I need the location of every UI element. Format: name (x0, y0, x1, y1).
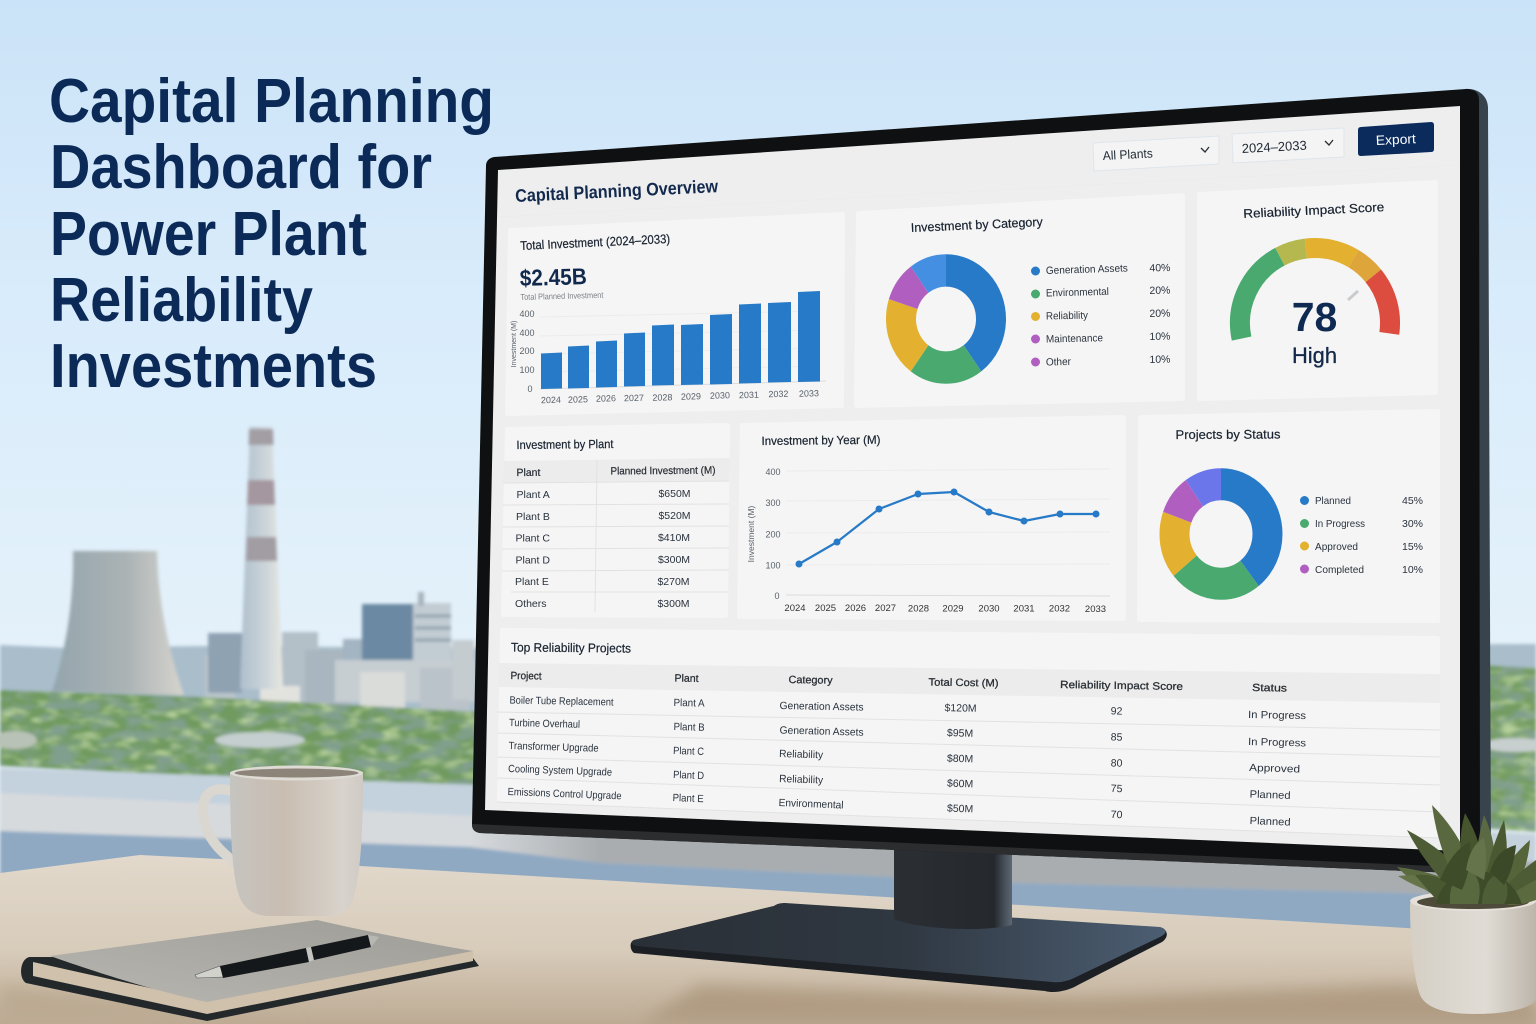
gauge (1240, 248, 1390, 339)
row: turbine: Generation Assets (779, 725, 864, 739)
row: boiler tube: Boiler Tube Replacement (509, 695, 614, 708)
bar chart x axis: 2024 (541, 395, 561, 405)
row: turbine: In Progress (1248, 736, 1306, 750)
row: emissions: $50M (947, 803, 973, 816)
chimney stack (240, 427, 283, 689)
row: cooling: $60M (947, 778, 973, 790)
table: investment by plant: Plant (516, 467, 541, 479)
panel: investment by plant (502, 426, 730, 616)
legend: category: Maintenance (1046, 332, 1103, 345)
filter: year range (1232, 128, 1344, 163)
legend: category: Generation Assets (1046, 262, 1128, 277)
table header row: Total Cost (M) (928, 677, 999, 690)
line chart x axis: 2026 (845, 603, 866, 614)
legend: status: Completed (1315, 564, 1364, 576)
cooling tower (52, 551, 184, 695)
row: turbine: Plant B (673, 721, 705, 734)
legend: category: Reliability (1046, 310, 1089, 322)
KPI caption: Total Planned Investment (520, 290, 604, 302)
notebook (21, 920, 479, 1021)
table: investment by plant: Others (515, 598, 547, 610)
panel heading: Total Investment (2024–2033) (520, 232, 670, 253)
table: investment by plant: Plant A (516, 489, 550, 501)
table: investment by plant: $520M (658, 510, 691, 522)
panel: projects by status (1140, 412, 1438, 620)
row: boiler tube: In Progress (1248, 709, 1306, 722)
row: turbine: 85 (1111, 731, 1123, 744)
legend: category: 20% (1149, 308, 1171, 320)
row: emissions: Environmental (778, 797, 844, 811)
panel heading: Reliability Impact Score (1243, 200, 1385, 221)
line chart x axis: 2031 (1013, 604, 1035, 614)
table rows (497, 695, 1440, 838)
title: Dashboard for (50, 133, 432, 202)
row: transformer: Reliability (779, 748, 824, 761)
desk surface (0, 855, 1536, 1024)
legend: category: Environmental (1046, 286, 1109, 299)
row: emissions (507, 786, 1291, 829)
row: transformer: Plant C (673, 745, 705, 758)
bar chart y axis: Investment (M) (511, 321, 518, 367)
row: boiler tube: $120M (944, 702, 977, 715)
panel heading: Investment by Year (M) (761, 433, 881, 448)
row: boiler tube: Plant A (673, 697, 705, 710)
table header row: Project (510, 670, 542, 682)
table: investment by plant: Plant C (516, 532, 550, 544)
line chart x axis: 2030 (978, 604, 1000, 614)
monitor metal side (1465, 89, 1491, 872)
legend: status: Planned (1315, 495, 1351, 507)
row: cooling (508, 763, 1291, 802)
line chart x axis: 2027 (875, 603, 896, 614)
row: emissions: 70 (1111, 809, 1123, 821)
line chart y axis: Investment (M) (746, 505, 756, 562)
bar chart: investment per year (511, 291, 826, 405)
line chart y axis: 300 (765, 498, 781, 508)
row: boiler tube: 92 (1111, 705, 1123, 718)
row: transformer: Approved (1249, 762, 1300, 776)
row: transformer: 80 (1111, 757, 1123, 770)
title (49, 67, 494, 401)
header: dashboard title: Capital Planning Overview (515, 176, 719, 206)
line chart y axis: 400 (765, 467, 781, 477)
line chart x axis: 2025 (815, 603, 836, 614)
line chart x axis: 2029 (942, 604, 964, 614)
line chart (746, 467, 1110, 615)
distant hills (0, 644, 1536, 720)
export button (1358, 122, 1434, 156)
table header row: Category (788, 674, 833, 687)
table header row: Plant (674, 673, 699, 685)
line chart y axis: 0 (774, 591, 780, 601)
export button: Export (1375, 131, 1416, 148)
bar chart x axis (541, 388, 819, 405)
legend: status: 30% (1402, 518, 1423, 530)
row: cooling: Cooling System Upgrade (508, 763, 612, 779)
window ledge (0, 768, 1536, 945)
table header row: Status (1252, 682, 1287, 695)
line chart y axis: 100 (765, 560, 781, 570)
bar chart y axis (511, 309, 535, 394)
tree line (0, 690, 480, 790)
table: investment by plant: $650M (658, 488, 691, 500)
coffee mug (203, 766, 363, 916)
table: investment by plant: $300M (657, 598, 690, 610)
row: transformer (508, 740, 1300, 776)
table: investment by plant (502, 458, 730, 612)
table: investment by plant: $410M (658, 532, 690, 544)
panel heading: Top Reliability Projects (511, 641, 631, 656)
bar chart y axis: 400 (519, 309, 535, 319)
legend: status: 10% (1402, 564, 1423, 576)
monitor bezel (472, 89, 1480, 874)
panel: top reliability projects (497, 630, 1440, 838)
line series (796, 488, 1100, 568)
legend: status: In Progress (1315, 518, 1365, 530)
bar chart x axis: 2033 (799, 388, 819, 399)
title: Investments (50, 332, 377, 401)
legend: status: Approved (1315, 541, 1358, 553)
row: cooling: Planned (1249, 789, 1291, 802)
bar chart x axis: 2025 (568, 394, 588, 405)
legend: category: 10% (1149, 331, 1171, 343)
panel heading: Projects by Status (1175, 427, 1281, 442)
gauge label: High (1292, 343, 1337, 368)
legend: category (1031, 262, 1171, 368)
bar chart y axis: 100 (519, 365, 535, 375)
row: cooling: Reliability (779, 773, 824, 787)
filter: all plants (1093, 136, 1219, 171)
potted plant (1397, 805, 1536, 1014)
table header row: Reliability Impact Score (1060, 679, 1183, 693)
bar chart x axis: 2026 (596, 393, 616, 404)
row: emissions: Plant E (672, 792, 704, 805)
title: Power Plant (50, 200, 367, 269)
title: Reliability (50, 266, 313, 335)
monitor (472, 89, 1491, 874)
line chart y axis (746, 467, 781, 601)
line chart x axis: 2033 (1085, 604, 1106, 615)
table: investment by plant: Plant D (516, 554, 550, 566)
table: investment by plant: $270M (657, 576, 690, 588)
panel: investment by category (856, 196, 1182, 406)
line chart x axis (784, 603, 1106, 615)
bar chart y axis: 0 (527, 384, 533, 394)
table: investment by plant: $300M (658, 554, 690, 566)
bar chart x axis: 2029 (681, 391, 701, 402)
row: emissions: Planned (1249, 815, 1291, 829)
row: transformer: $80M (947, 753, 973, 765)
line chart x axis: 2032 (1049, 604, 1070, 614)
row: transformer: Transformer Upgrade (508, 740, 599, 755)
bar chart x axis: 2032 (768, 389, 789, 399)
bar chart y axis: 400 (519, 328, 535, 338)
plant pot (1410, 903, 1536, 1014)
legend: status: 15% (1402, 541, 1423, 553)
row: emissions: Emissions Control Upgrade (507, 786, 622, 802)
panel: reliability impact score (1200, 182, 1436, 398)
legend: status (1300, 495, 1423, 576)
row: turbine: Turbine Overhaul (509, 717, 580, 731)
row: cooling: Plant D (673, 769, 705, 782)
row: turbine: $95M (947, 727, 973, 740)
pen (195, 935, 379, 978)
row: boiler tube (509, 695, 1306, 722)
panel heading: Investment by Plant (516, 437, 614, 452)
line chart y axis: 200 (765, 530, 781, 540)
gauge value: 78 (1292, 294, 1337, 340)
KPI value: $2.45B (519, 263, 587, 291)
monitor stand (631, 845, 1167, 992)
legend: category: 20% (1149, 285, 1171, 297)
filter: year range: 2024–2033 (1241, 138, 1307, 156)
bar chart x axis: 2030 (710, 390, 730, 401)
plant leaves (1397, 805, 1536, 905)
plant buildings (205, 592, 475, 710)
donut chart: category (901, 270, 991, 368)
legend: category: 40% (1149, 262, 1171, 275)
bar chart x axis: 2027 (624, 393, 644, 403)
filter: all plants: All Plants (1102, 146, 1153, 163)
table: investment by plant: Planned Investment (M) (610, 465, 716, 477)
table: investment by plant: Plant E (515, 576, 549, 588)
table: investment by plant: Plant B (516, 511, 550, 523)
panel heading: Investment by Category (911, 215, 1044, 235)
donut chart: status (1174, 484, 1268, 584)
screen (485, 106, 1460, 851)
bar chart y axis: 200 (519, 346, 535, 356)
bar chart x axis: 2028 (652, 392, 673, 403)
line chart x axis: 2028 (908, 604, 929, 614)
row: cooling: 75 (1111, 783, 1123, 795)
line chart x axis: 2024 (784, 603, 806, 614)
table header row (498, 663, 1440, 703)
row: boiler tube: Generation Assets (779, 700, 864, 714)
bar chart x axis: 2031 (739, 390, 759, 400)
legend: status: 45% (1402, 495, 1423, 507)
legend: category: Other (1046, 356, 1072, 368)
row: turbine (509, 717, 1306, 750)
panel: investment by year (740, 418, 1124, 618)
legend: category: 10% (1149, 354, 1171, 366)
title: Capital Planning (49, 67, 494, 136)
panel: total investment (508, 214, 842, 414)
